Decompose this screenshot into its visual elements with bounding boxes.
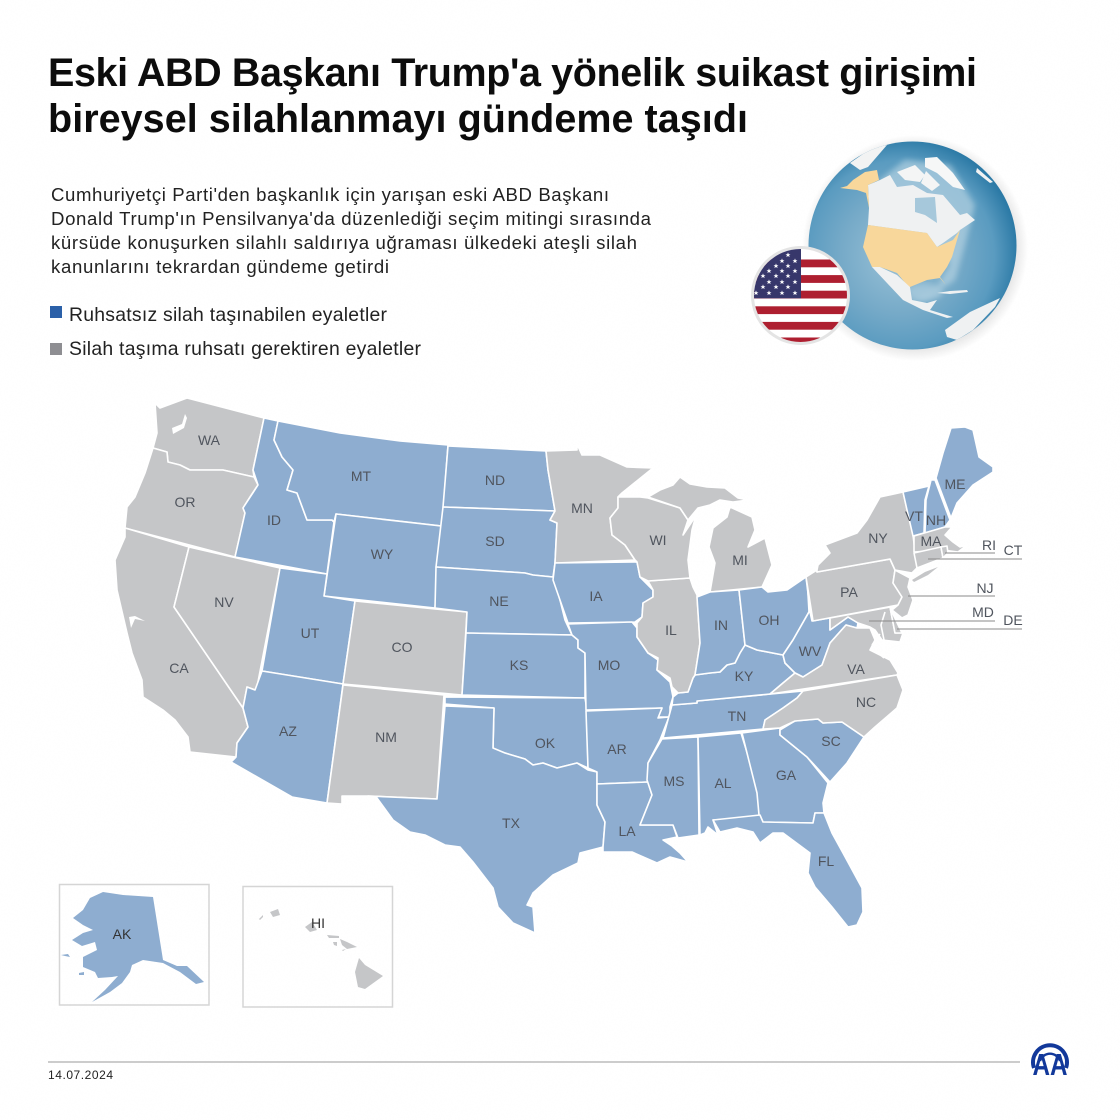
Hudson Bay — [915, 197, 937, 223]
title: bireysel silahlanmayı gündeme taşıdı — [48, 97, 748, 141]
state labels: NM — [375, 729, 397, 745]
state: IA — [553, 562, 653, 623]
state: NM — [327, 685, 444, 804]
state labels — [169, 432, 1023, 869]
state: TN — [663, 691, 803, 738]
state labels: WV — [799, 643, 822, 659]
state labels: SC — [821, 733, 841, 749]
intro text: kanunlarını tekrardan gündeme getirdi — [51, 256, 389, 277]
Long Island — [912, 567, 938, 582]
state labels: ME — [944, 476, 966, 492]
logo: AA — [1032, 1047, 1068, 1082]
state labels: NC — [856, 694, 876, 710]
Greenland — [925, 157, 965, 190]
state: WA — [153, 398, 264, 477]
state: VA — [770, 625, 898, 694]
state: MD — [830, 607, 903, 642]
inset: Alaska — [60, 884, 209, 1005]
Mexico and Central America — [872, 267, 953, 318]
state labels: IA — [589, 588, 603, 604]
US map — [115, 398, 1023, 933]
state: KS — [462, 633, 585, 698]
state labels: WI — [649, 532, 667, 548]
state: MA — [914, 527, 967, 552]
state labels: ND — [485, 472, 505, 488]
state labels: MO — [598, 657, 620, 673]
state labels: MD — [972, 604, 994, 620]
Chesapeake Bay — [872, 612, 885, 658]
state: AL — [698, 733, 762, 835]
state labels: IL — [665, 622, 677, 638]
South America — [945, 298, 1000, 340]
date: 14.07.2024 — [48, 1068, 113, 1082]
far north-east land — [976, 168, 993, 183]
state: CO — [343, 601, 467, 695]
state labels: NY — [868, 530, 888, 546]
state labels: CA — [169, 660, 189, 676]
state labels: OH — [758, 612, 780, 628]
state: CA — [115, 528, 248, 757]
state labels: MA — [920, 533, 942, 549]
state labels: NH — [926, 512, 946, 528]
state: SC — [780, 719, 864, 782]
state: NE — [435, 567, 572, 635]
intro text: Cumhuriyetçi Parti'den başkanlık için yarışan eski ABD Başkanı — [51, 184, 609, 205]
state labels: OR — [174, 494, 196, 510]
state labels: RI — [982, 537, 996, 553]
state labels: IN — [714, 617, 728, 633]
state: OR — [125, 448, 258, 557]
state: MO — [568, 622, 673, 717]
state labels: GA — [776, 767, 797, 783]
state: WY — [324, 514, 441, 608]
state labels: TN — [728, 708, 746, 724]
Cuba — [937, 290, 968, 294]
state labels: NJ — [976, 580, 994, 596]
state: VT — [903, 486, 929, 536]
state labels: CO — [392, 639, 413, 655]
state labels: UT — [301, 625, 320, 641]
state labels: PA — [840, 584, 858, 600]
contiguous USA — [863, 225, 960, 287]
intro text: kürsüde konuşurken silahlı saldırıya uğraması ülkedeki ateşli silah — [51, 232, 637, 253]
state: ND — [443, 446, 555, 511]
continental shelf glow — [870, 160, 975, 300]
state labels: FL — [818, 853, 834, 869]
state labels: VA — [847, 661, 865, 677]
state labels: LA — [618, 823, 636, 839]
legend — [50, 304, 422, 360]
flag — [750, 246, 852, 345]
state labels: WA — [198, 432, 221, 448]
state: DE — [890, 607, 902, 633]
legend: permit required states: Silah taşıma ruhsatı gerektiren eyaletler — [69, 338, 422, 360]
state: FL — [713, 813, 863, 927]
state: NJ — [892, 570, 913, 618]
state: PA — [806, 559, 902, 621]
state: AZ — [231, 671, 343, 803]
state labels: CT — [1004, 542, 1023, 558]
state: MI upper peninsula — [648, 477, 748, 520]
intro text: Donald Trump'ın Pensilvanya'da düzenlediği seçim mitingi sırasında — [51, 208, 652, 229]
state labels: AL — [714, 775, 732, 791]
Puget Sound and San Francisco Bay — [129, 414, 187, 628]
Russia far north — [850, 145, 887, 170]
state: IN — [695, 590, 745, 675]
state labels: KY — [735, 668, 754, 684]
state: LA — [597, 782, 688, 863]
Canadian arctic islands — [897, 165, 925, 182]
state labels: WY — [371, 546, 394, 562]
state: ME — [936, 427, 993, 518]
state labels: KS — [510, 657, 528, 673]
Alaska — [840, 170, 879, 208]
globe — [802, 135, 1028, 361]
state: SD — [436, 507, 557, 577]
state: KY — [672, 645, 795, 705]
Canada — [868, 175, 975, 247]
state labels: AZ — [279, 723, 297, 739]
state: OK — [445, 697, 588, 768]
inset: Hawaii: HI — [311, 915, 325, 931]
state: NV — [174, 547, 280, 708]
footer rule — [48, 1061, 1020, 1063]
state labels: MT — [351, 468, 372, 484]
inset: Hawaii — [243, 886, 392, 1007]
state labels: TX — [502, 815, 521, 831]
state: ID — [235, 418, 334, 574]
state labels: MI — [732, 552, 748, 568]
state: CT — [914, 547, 943, 568]
state: NY — [817, 492, 917, 573]
state labels: OK — [535, 735, 556, 751]
state labels: NE — [489, 593, 509, 609]
intro text — [51, 184, 652, 277]
state labels: VT — [905, 508, 923, 524]
callout leader lines — [869, 553, 1022, 629]
state: MI lower peninsula — [709, 507, 772, 592]
state: WI — [610, 497, 698, 581]
state: RI — [941, 546, 948, 558]
state: MS — [640, 737, 699, 838]
state: AR — [586, 708, 669, 784]
state: OH — [739, 577, 810, 655]
state: NC — [763, 675, 903, 737]
Gulf of Mexico shelf — [907, 284, 943, 300]
legend: permitless states: Ruhsatsız silah taşınabilen eyaletler — [69, 304, 388, 326]
state: MN — [546, 444, 653, 563]
inset: Alaska: AK — [113, 926, 132, 942]
state labels: SD — [485, 533, 505, 549]
state labels: DE — [1003, 612, 1023, 628]
state: MT — [274, 421, 448, 526]
state labels: NV — [214, 594, 234, 610]
state: WV — [783, 577, 858, 677]
title: Eski ABD Başkanı Trump'a yönelik suikast girişimi — [48, 51, 977, 95]
title — [48, 51, 977, 141]
state: TX — [368, 706, 605, 933]
state labels: MN — [571, 500, 593, 516]
state labels: ID — [267, 512, 281, 528]
state: UT — [262, 568, 355, 684]
state labels: AR — [607, 741, 627, 757]
state: GA — [742, 728, 828, 823]
state: IL — [637, 578, 700, 693]
state labels: MS — [664, 773, 684, 789]
state: NH — [925, 480, 950, 533]
